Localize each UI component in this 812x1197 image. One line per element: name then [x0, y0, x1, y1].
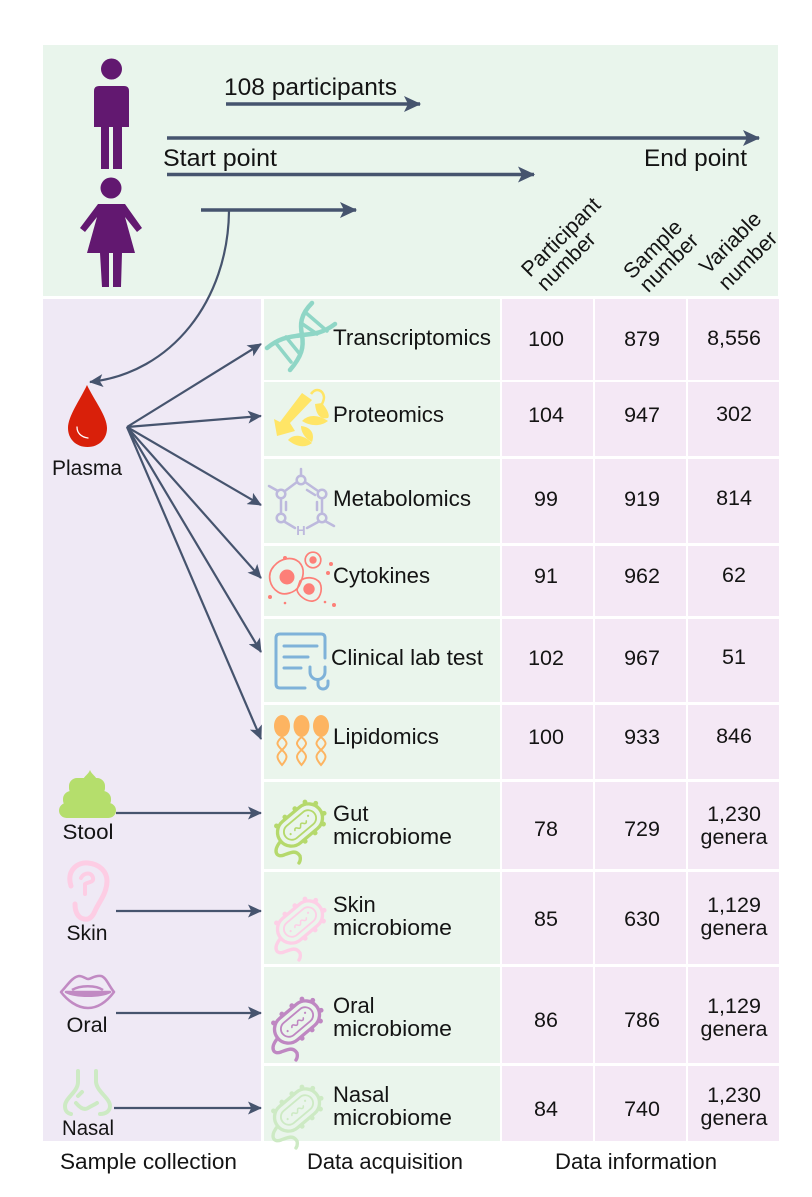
- label: nasal: Nasal: [62, 1116, 114, 1140]
- values: sample number column: 740: [624, 1097, 660, 1121]
- arrow: second timeline: [167, 136, 759, 140]
- label: skin microbiome: Skin: [333, 892, 376, 917]
- panel: data acquisition rows: [264, 299, 500, 1141]
- label: metabolomics: Metabolomics: [333, 486, 471, 511]
- values: participant number column: 100: [528, 725, 564, 749]
- values: participant number column: 99: [534, 487, 558, 511]
- values: sample number column: 947: [624, 403, 660, 427]
- icon: gut bacterium: [269, 793, 334, 863]
- caption: data acquisition: Data acquisition: [307, 1149, 463, 1174]
- values: variable number column: 1,129: [707, 994, 761, 1018]
- icon: metabolite molecule: [269, 469, 334, 528]
- arrow: stool to gut microbiome: [116, 812, 261, 814]
- values: variable number column: 62: [722, 563, 746, 587]
- icon: female participant: [80, 178, 142, 287]
- values: sample number column: 933: [624, 725, 660, 749]
- icon: clinical document and stethoscope: [276, 634, 328, 689]
- label: oral: Oral: [66, 1013, 108, 1037]
- arrow: skin to skin microbiome: [116, 910, 261, 912]
- panel: data information cells: [502, 299, 779, 1141]
- icon: male participant: [94, 58, 129, 169]
- label: stool: Stool: [62, 820, 114, 844]
- icon: nasal bacterium: [266, 1078, 331, 1148]
- values: participant number column: 91: [534, 564, 558, 588]
- header: variable number: [695, 207, 784, 296]
- values: sample number column: 962: [624, 564, 660, 588]
- label: proteomics: Proteomics: [333, 402, 444, 427]
- values: sample number column: 729: [624, 817, 660, 841]
- values: variable number column: 814: [716, 486, 752, 510]
- header: sample number: [619, 214, 703, 298]
- arrow: first timeline: [226, 102, 420, 106]
- values: participant number column: 78: [534, 817, 558, 841]
- values: sample number column: 919: [624, 487, 660, 511]
- label: oral microbiome: microbiome: [333, 1016, 452, 1041]
- panel: sample collection background: [43, 299, 261, 1141]
- header: sample number: Sample: [619, 215, 687, 284]
- values: variable number column: [701, 326, 768, 1130]
- values: variable number column: 846: [716, 724, 752, 748]
- label: nasal microbiome: [333, 1082, 452, 1130]
- label: gut microbiome: microbiome: [333, 824, 452, 849]
- values: variable number column: 51: [722, 645, 746, 669]
- icon: nose: [65, 1071, 110, 1114]
- values: participant number column: 85: [534, 907, 558, 931]
- values: participant number column: 104: [528, 403, 564, 427]
- label: gut microbiome: [333, 801, 452, 849]
- header: participant number: number: [532, 227, 601, 296]
- label: skin microbiome: [333, 892, 452, 940]
- label: H atom: H: [296, 523, 306, 538]
- values: participant number column: 86: [534, 1008, 558, 1032]
- values: variable number column: genera: [701, 1017, 768, 1041]
- values: participant number column: 102: [528, 646, 564, 670]
- values: sample number column: 967: [624, 646, 660, 670]
- arrow: fourth timeline: [201, 208, 356, 212]
- header: variable number: number: [714, 226, 782, 295]
- label: oral microbiome: [333, 993, 452, 1041]
- header: sample number: number: [635, 228, 703, 297]
- label: transcriptomics: Transcriptomics: [333, 325, 491, 350]
- label: nasal microbiome: Nasal: [333, 1082, 389, 1107]
- label: 108 participants: 108 participants: [224, 74, 397, 101]
- caption: data information: Data information: [555, 1149, 717, 1174]
- values: variable number column: 1,129: [707, 893, 761, 917]
- icon: skin bacterium: [269, 890, 334, 960]
- values: participant number column: 100: [528, 327, 564, 351]
- label: skin: Skin: [66, 921, 108, 945]
- icon: DNA helix: [267, 303, 335, 370]
- label: skin microbiome: microbiome: [333, 915, 452, 940]
- label: end point: End point: [644, 145, 747, 172]
- icon: plasma blood drop: [68, 385, 107, 447]
- header: participant number: Participant: [517, 193, 605, 282]
- label: clinical lab test: Clinical lab test: [331, 645, 483, 670]
- icon: cytokine cells: [268, 552, 336, 607]
- label: oral microbiome: Oral: [333, 993, 375, 1018]
- caption: sample collection: Sample collection: [60, 1149, 237, 1174]
- label: cytokines: Cytokines: [333, 563, 430, 588]
- values: sample number column: 630: [624, 907, 660, 931]
- arrows: plasma to plasma-derived assays: [127, 344, 261, 739]
- values: participant number column: [528, 327, 564, 1121]
- header: variable number: Variable: [695, 207, 766, 279]
- icon: lipids: [274, 715, 329, 765]
- values: participant number column: 84: [534, 1097, 558, 1121]
- values: variable number column: 1,230: [707, 802, 761, 826]
- values: variable number column: genera: [701, 825, 768, 849]
- values: sample number column: 786: [624, 1008, 660, 1032]
- panel: cohort timeline: [43, 45, 784, 298]
- values: variable number column: 302: [716, 402, 752, 426]
- label: plasma: Plasma: [52, 456, 122, 480]
- arrow: third timeline: [167, 173, 534, 176]
- arrow: curved link to plasma: [90, 211, 229, 382]
- icon: lips: [61, 976, 114, 1008]
- values: variable number column: genera: [701, 1106, 768, 1130]
- values: variable number column: genera: [701, 916, 768, 940]
- values: sample number column: [624, 327, 660, 1121]
- label: nasal microbiome: microbiome: [333, 1105, 452, 1130]
- icon: protein: [274, 390, 329, 446]
- arrow: nasal to nasal microbiome: [114, 1107, 261, 1109]
- icon: ear: [70, 863, 107, 919]
- label: gut microbiome: Gut: [333, 801, 368, 826]
- values: variable number column: 1,230: [707, 1083, 761, 1107]
- values: sample number column: 879: [624, 327, 660, 351]
- icon: stool: [59, 770, 116, 818]
- arrow: oral to oral microbiome: [116, 1012, 261, 1014]
- label: lipidomics: Lipidomics: [333, 724, 439, 749]
- values: variable number column: 8,556: [707, 326, 761, 350]
- icon: oral bacterium: [266, 990, 331, 1060]
- label: start point: Start point: [163, 145, 277, 172]
